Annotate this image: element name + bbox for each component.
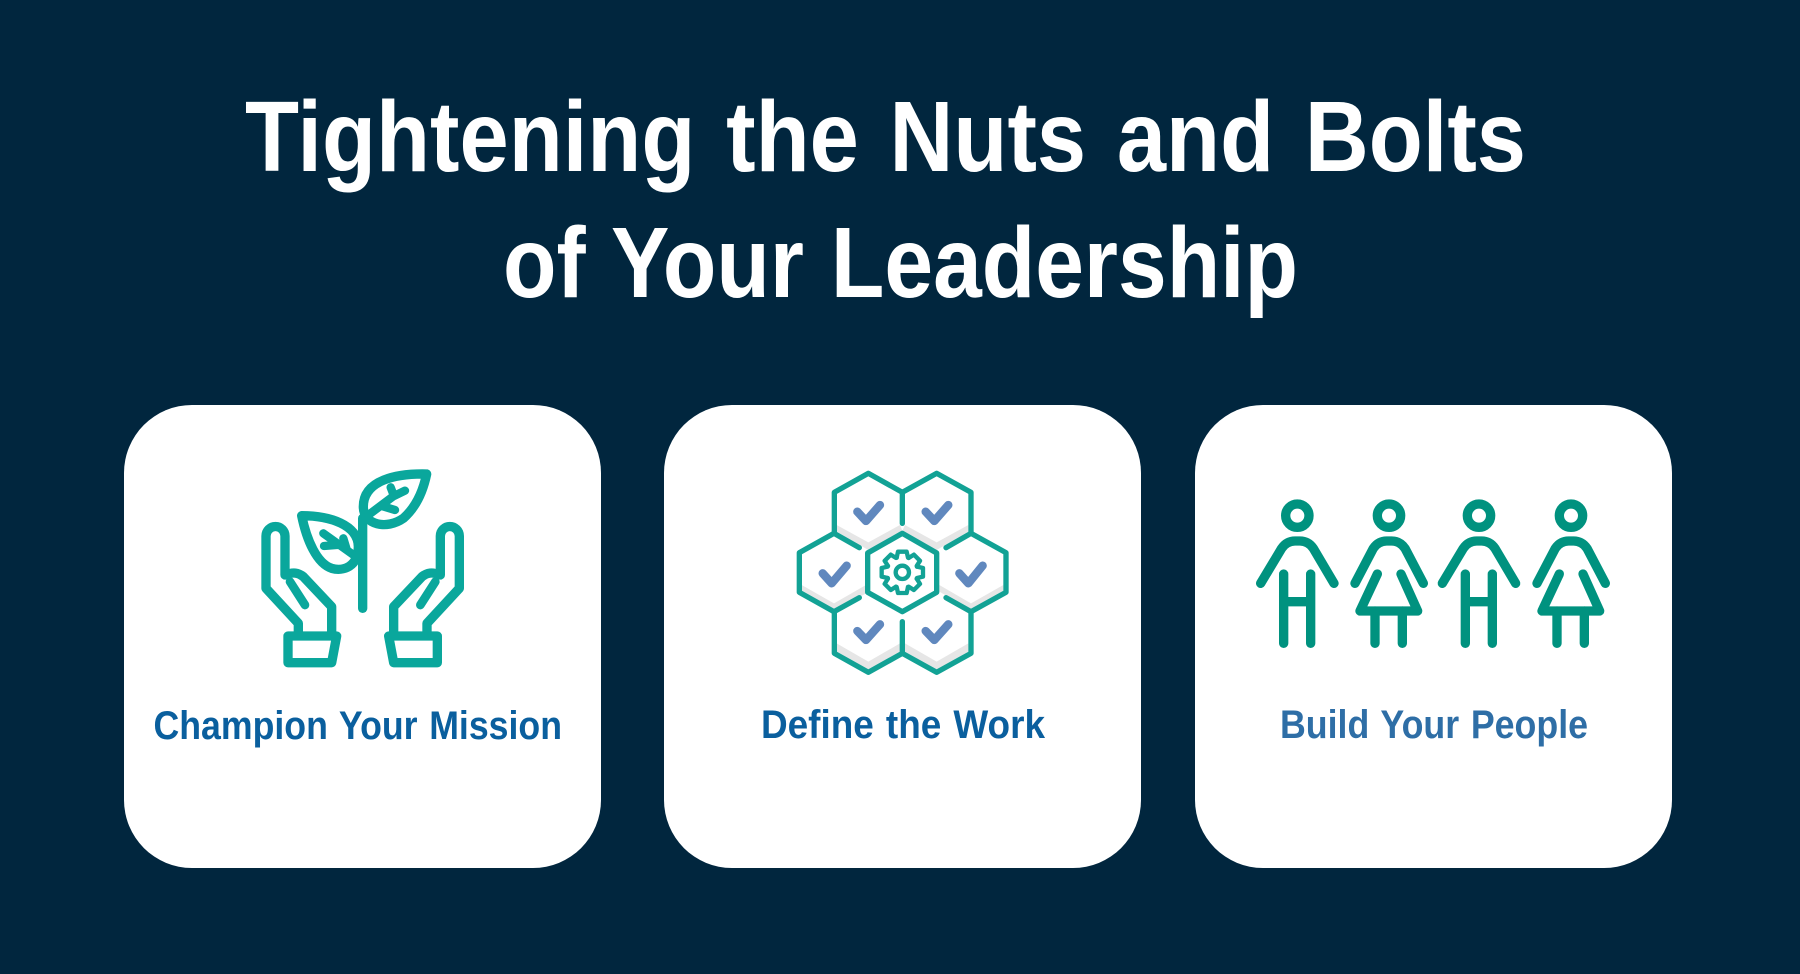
label: define the work: Define the Work	[761, 703, 1046, 747]
check marks	[823, 505, 983, 640]
person 1	[1261, 504, 1334, 643]
label: champion your mission: Champion Your Mission	[154, 704, 562, 748]
label: build your people: Build Your People	[1280, 703, 1588, 747]
panel: define the work	[664, 405, 1141, 868]
panel: build your people	[1195, 405, 1672, 868]
title: Tightening the Nuts and Bolts	[245, 81, 1526, 193]
person 2	[1355, 504, 1423, 643]
icon: hands holding a plant	[266, 474, 459, 663]
panel: champion your mission	[124, 405, 601, 868]
gear	[882, 552, 923, 593]
icon: honeycomb of checks around a gear	[799, 473, 1006, 672]
hexagon outlines	[799, 473, 1006, 672]
icon: four people	[1261, 504, 1605, 643]
person 4	[1537, 504, 1605, 643]
title	[245, 81, 1526, 319]
person 3	[1442, 504, 1516, 643]
grey hexagon shading	[802, 525, 1003, 670]
title: of Your Leadership	[503, 207, 1298, 319]
